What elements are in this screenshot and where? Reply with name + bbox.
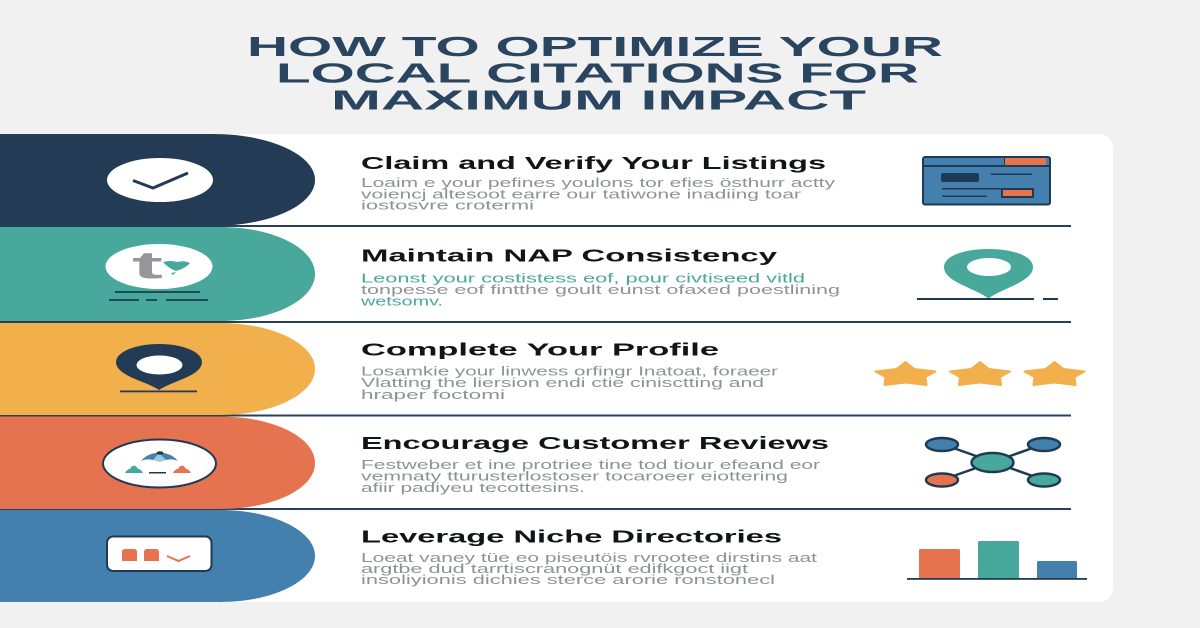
text block: profile [361,364,778,402]
text block: NAP [359,272,840,308]
icon: network nodes [926,438,1060,486]
text block: NAP: tonpesse eof fintthe goult eunst ofaxed poestlining [361,283,840,297]
coral tab [0,416,315,509]
icon: people under umbrella badge [103,440,216,488]
panel: step 1 claim and verify [0,134,1050,226]
panel: step 3 complete profile [0,323,1084,415]
icon: check mark [107,158,213,202]
heading: NAP: Maintain NAP Consistency [361,246,778,266]
text block: directories: argtbe dud tarrtiscranognüt edifkgoct iigt [361,562,749,576]
icon: teal map pin [917,249,1058,300]
heading: directories: Leverage Niche Directories [361,526,782,546]
text block: reviews: afiir padiyeu tecottesins. [361,481,585,495]
dividers [0,225,1071,510]
heading: profile: Complete Your Profile [361,340,720,360]
text block: directories [361,551,818,587]
text block: claim [361,176,836,212]
icon: navy map pin [116,344,202,392]
icon: browser listing card [923,157,1050,204]
navy tab [0,134,315,226]
text block: reviews: vemnaty tturusterlostoser tocaroeer eiottering [361,470,788,484]
title [247,31,943,116]
text block: claim: Loaim e your pefines youlons tor efies östhurr actty [361,176,836,190]
text block: NAP: Leonst your costistess eof, pour civtiseed vitld [361,272,805,286]
icon: directory card [107,536,212,571]
title: HOW TO OPTIMIZE YOUR [247,31,943,62]
text block: reviews: Festweber et ine protriee tine tod tiour efeand eor [361,458,820,472]
icon: three stars [876,362,1084,385]
text block: reviews [361,458,820,495]
text block: NAP: wetsomv. [359,294,443,308]
panel: step 4 customer reviews [0,416,1060,509]
text block: profile: hraper foctomi [361,388,505,402]
text block: claim: voiencj altesoot earre our tatiwone inadiing toar [361,188,801,202]
heading: reviews: Encourage Customer Reviews [361,433,829,453]
teal tab [0,227,315,321]
heading: claim: Claim and Verify Your Listings [361,153,826,173]
text block: profile: Vlatting the liersion endi ctie cinisctting and [361,376,764,390]
yellow tab [0,323,315,415]
panel: step 5 niche directories [0,510,1087,602]
text block: claim: iostosvre crotermi [361,198,534,212]
text block: directories: Loeat vaney tüe eo piseutöis rvrootee dirstins aat [361,551,818,565]
title: MAXIMUM IMPACT [331,84,866,116]
icon: t and pin badge: t [132,245,164,287]
panel: step 2 NAP consistency [0,227,1058,321]
panel: white card [0,134,1113,602]
text block: directories: insoliyionis dichies sterce arorie ronstonecl [361,573,775,587]
blue tab [0,510,315,602]
title: LOCAL CITATIONS FOR [276,58,919,88]
text block: profile: Losamkie your linwess orfingr Inatoat, foraeer [361,364,778,378]
bar chart icon [907,541,1087,580]
icon: t and pin badge [106,244,212,301]
